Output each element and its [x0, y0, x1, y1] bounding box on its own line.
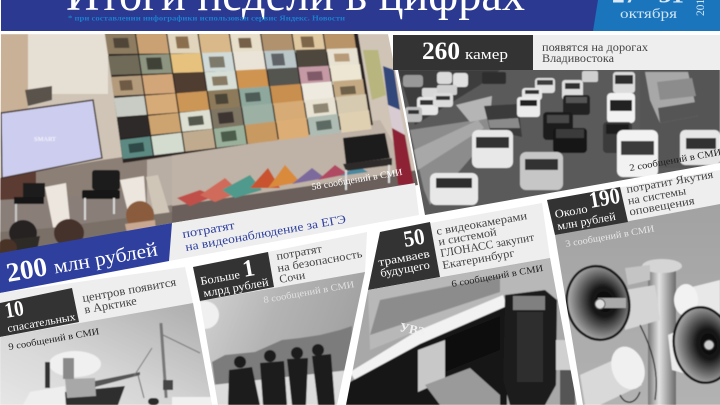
caption: с видеокамерами [435, 210, 528, 238]
month: октября [620, 7, 678, 22]
panel: traffic cameras [390, 35, 720, 218]
distant cars [403, 75, 423, 87]
label line two: млн рублей [556, 211, 617, 233]
camera on top of screen [25, 86, 52, 106]
light strip [0, 267, 193, 337]
caption: в Арктике [83, 293, 138, 316]
panel: exam video surveillance [0, 27, 430, 293]
truck [484, 104, 522, 137]
light strip [193, 232, 367, 301]
left lower horn [580, 361, 642, 405]
caption line one: потратят [181, 218, 237, 241]
flag right [383, 66, 400, 110]
colourful decoration [177, 190, 208, 206]
unit: камер [465, 47, 508, 63]
big number unit: млн рублей [52, 238, 160, 278]
number: 190 [587, 183, 622, 213]
tram brand lettering: УВЗ [398, 319, 426, 339]
right upper horn [692, 280, 720, 315]
second horn [668, 332, 684, 374]
message count: 3 сообщений в СМИ [565, 223, 655, 250]
label: трамваев [377, 248, 431, 269]
source note: * при составлении инфографики использован сервис Яндекс. Новости [68, 14, 346, 22]
main horn neck [625, 285, 660, 330]
caption: Екатеринбург [441, 247, 516, 272]
dark label [368, 222, 440, 290]
label [377, 248, 431, 280]
panel: trams [345, 203, 585, 405]
caption line two: на видеонаблюдение за ЕГЭ [184, 212, 347, 254]
caption: потратит Якутия [625, 169, 715, 196]
caption [275, 243, 363, 286]
caption: на системы [627, 185, 687, 207]
photo: monitoring room: SMART [34, 136, 56, 143]
chair right [343, 133, 390, 164]
caption: и системой [437, 226, 498, 248]
label line two: млрд рублей [202, 277, 270, 300]
caption: потратят [275, 243, 323, 263]
light strip [533, 35, 720, 70]
number: 10 [3, 295, 26, 323]
audience [0, 212, 172, 246]
label line one: Около [554, 203, 589, 221]
photo: tram [345, 255, 585, 405]
bus [645, 72, 698, 123]
caption: на безопасность [276, 248, 363, 275]
caption: ГЛОНАСС закупит [439, 232, 535, 260]
header band [1, 0, 720, 31]
caption [435, 210, 535, 272]
panel: Yakutia alert systems [547, 169, 720, 405]
band: caption [169, 183, 419, 261]
photo: icebreaker [0, 300, 220, 405]
message count: 58 сообщений в СМИ [311, 167, 403, 193]
photo: traffic jam [390, 68, 720, 218]
video wall [104, 27, 373, 163]
label: спасательных [6, 311, 77, 335]
light strip [547, 170, 720, 235]
photo: loudspeakers [550, 200, 720, 405]
light strip [368, 203, 550, 290]
lower wall behind stands [34, 155, 172, 198]
big number: 200 [4, 251, 49, 288]
caption [81, 275, 178, 316]
panel: Sochi security [191, 232, 370, 405]
caption: центров появится [81, 275, 178, 305]
number: 50 [402, 224, 427, 252]
pole [648, 262, 676, 405]
banner stands [45, 183, 70, 232]
blue label [0, 223, 172, 293]
message count: 6 сообщений в СМИ [451, 263, 544, 290]
chairs [92, 170, 120, 190]
number: 1 [241, 255, 257, 283]
officers [228, 344, 335, 405]
floor [172, 170, 418, 226]
caption: Сочи [278, 270, 306, 286]
main horn [565, 264, 632, 342]
photo: police officers [191, 270, 370, 405]
label line one: Больше [199, 269, 241, 288]
dark label [393, 35, 533, 70]
message count: 2 сообщений в СМИ [629, 147, 720, 174]
barrier [410, 118, 495, 205]
projection screen [1, 100, 102, 178]
label: будущего [379, 259, 431, 280]
caption: оповещения [628, 195, 696, 218]
caption line two: Владивостока [542, 53, 614, 65]
dark label [193, 252, 274, 301]
panel: rescue centres [0, 267, 220, 405]
dark label [547, 187, 628, 235]
message count: 8 сообщений в СМИ [263, 279, 355, 306]
number: 260 [422, 38, 460, 65]
road cars [535, 78, 555, 93]
message count: 9 сообщений в СМИ [8, 326, 100, 353]
caption line one: появятся на дорогах [542, 42, 648, 54]
date block background [593, 0, 720, 31]
caption [625, 169, 715, 218]
photo: monitoring room [0, 27, 430, 260]
dark label [0, 288, 79, 337]
